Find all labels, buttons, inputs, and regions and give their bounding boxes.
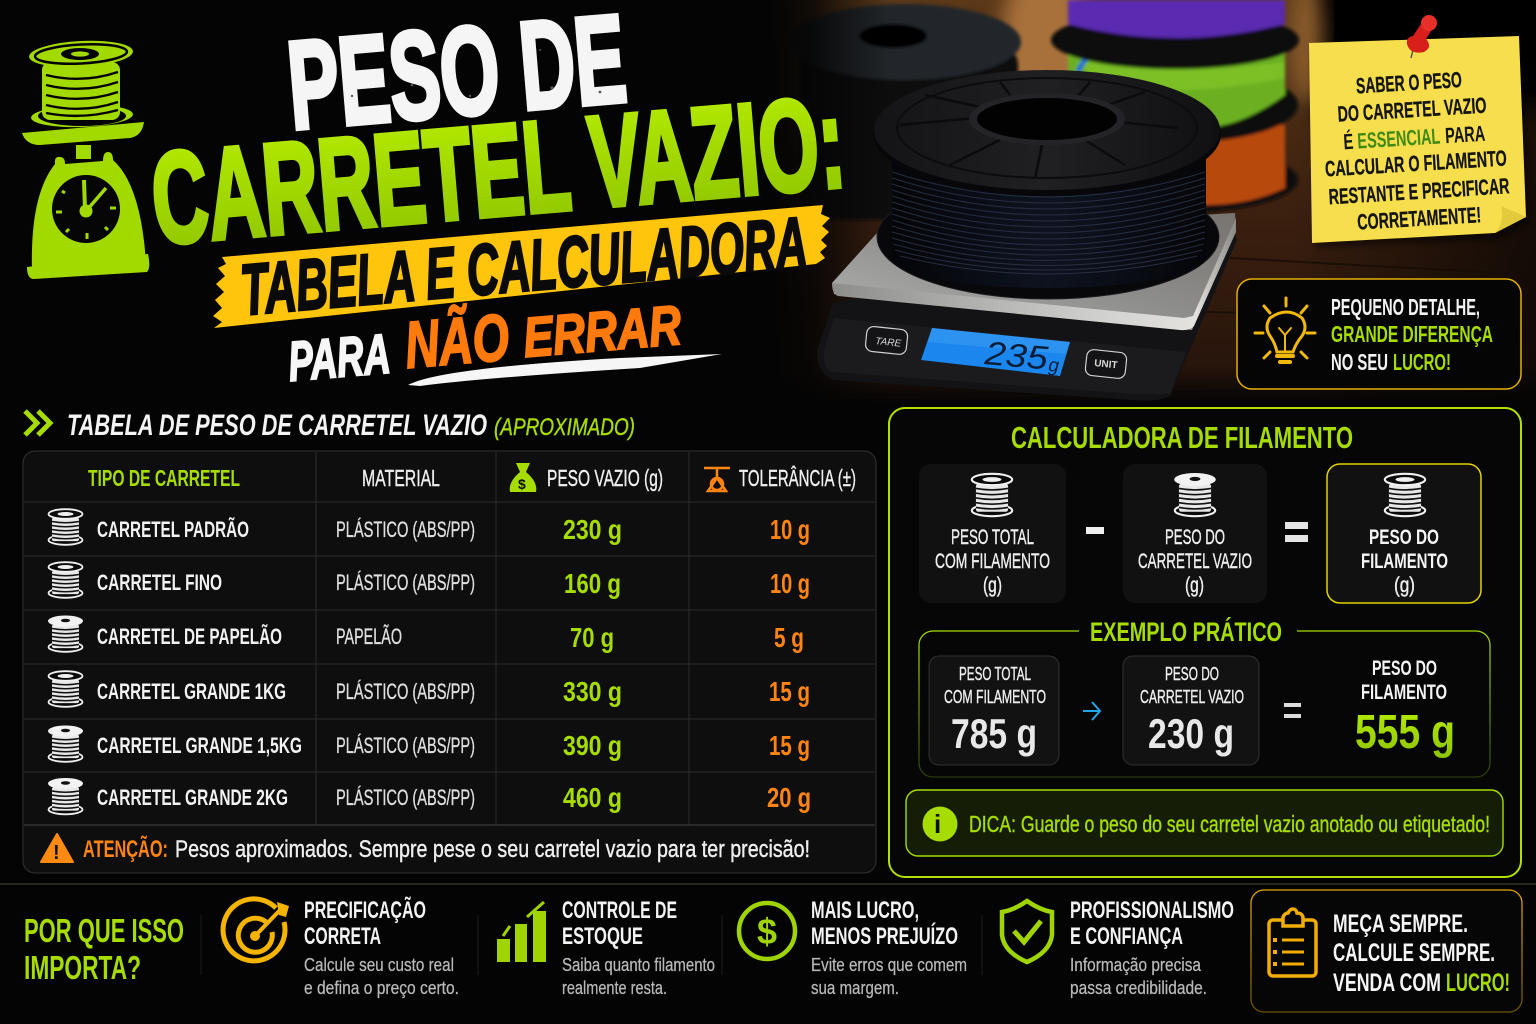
fade of photo into black	[770, 0, 890, 405]
example: peso total: PESO TOTAL	[959, 664, 1031, 684]
row: carretel grande 1,5kg: 15 g	[769, 730, 810, 761]
formula box: peso do filamento: (g)	[1394, 574, 1415, 597]
attention note: !	[53, 842, 60, 864]
row: carretel grande 2kg: 20 g	[767, 782, 811, 813]
formula box: peso total: (g)	[983, 574, 1002, 597]
icon: target	[223, 899, 289, 961]
item: controle de estoque: CONTROLE DE	[562, 897, 677, 924]
tip box: i	[934, 809, 941, 839]
icon: money bag: $	[518, 476, 526, 492]
row: carretel grande 1,5kg: PLÁSTICO (ABS/PP)	[336, 733, 475, 758]
row: carretel de papelão: CARRETEL DE PAPELÃO	[97, 624, 282, 649]
title: CARRETEL VAZIO: CARRETEL VAZIO:	[146, 68, 850, 272]
panel: weight table	[23, 451, 876, 873]
subtitle band: tabela e calculadora	[213, 203, 830, 331]
icon: light bulb	[1255, 298, 1315, 362]
icon: spool on kitchen scale	[22, 38, 149, 279]
heading	[24, 912, 184, 986]
heading: tabela: (APROXIMADO)	[494, 414, 635, 441]
example: result: FILAMENTO	[1361, 681, 1447, 704]
row: carretel grande 1kg: PLÁSTICO (ABS/PP)	[336, 679, 475, 704]
scale display 235g: 235	[982, 334, 1050, 377]
formula box: peso do filamento	[1327, 464, 1481, 603]
background dark spool	[789, 4, 1021, 220]
callout: pequeno detalhe	[1237, 279, 1521, 389]
main black filament spool	[873, 70, 1221, 299]
row: carretel padrão: 10 g	[770, 514, 810, 545]
row: carretel padrão: CARRETEL PADRÃO	[97, 517, 249, 542]
item: profissionalismo	[1002, 897, 1234, 998]
formula box: peso do filamento: FILAMENTO	[1361, 550, 1448, 573]
tip box	[906, 790, 1503, 856]
bottom strip: por que isso importa	[0, 884, 1536, 1012]
table header	[88, 463, 856, 492]
item: controle de estoque: Saiba quanto filamento	[562, 955, 715, 975]
item: mais lucro: sua margem.	[811, 978, 899, 998]
table header: PESO VAZIO (g)	[547, 465, 663, 491]
row: carretel fino: PLÁSTICO (ABS/PP)	[336, 570, 475, 595]
item: controle de estoque: realmente resta.	[562, 978, 667, 998]
icon: red push pin	[1407, 15, 1437, 58]
formula box: peso do carretel	[1123, 464, 1267, 603]
UNIT button: UNIT	[1094, 358, 1118, 371]
row: carretel grande 1,5kg: CARRETEL GRANDE 1,5KG	[97, 733, 302, 758]
row: carretel grande 1kg	[48, 671, 810, 707]
scale display 235g	[921, 328, 1070, 377]
title: PESO DE	[283, 0, 631, 156]
formula box: peso do carretel: PESO DO	[1165, 526, 1225, 549]
item: precificação correta: Calcule seu custo real	[304, 955, 454, 975]
icon: dollar circle: $	[757, 911, 777, 952]
item: precificação correta: e defina o preço certo.	[304, 978, 459, 998]
item: profissionalismo: Informação precisa	[1070, 955, 1202, 975]
table header: TIPO DE CARRETEL	[88, 465, 240, 491]
row: carretel grande 1kg: 330 g	[563, 676, 622, 707]
table header: MATERIAL	[362, 465, 440, 491]
row: carretel de papelão: PAPELÃO	[336, 624, 402, 649]
table header: TOLERÂNCIA (±)	[739, 465, 856, 491]
formula box: peso do carretel: CARRETEL VAZIO	[1138, 550, 1252, 573]
formula box: peso total: COM FILAMENTO	[935, 550, 1050, 573]
row: carretel fino: CARRETEL FINO	[97, 570, 222, 595]
icon: bar chart	[497, 902, 546, 962]
scale base	[817, 213, 1237, 400]
minus sign	[1086, 527, 1104, 534]
attention note: ATENÇÃO:	[83, 835, 168, 863]
formula box: peso do carretel: (g)	[1185, 574, 1204, 597]
callout: meça sempre	[1251, 890, 1522, 1012]
example: peso total: 785 g	[951, 710, 1037, 757]
equals sign	[1285, 522, 1308, 542]
icon: shield check	[1002, 901, 1052, 962]
row: carretel fino	[48, 562, 810, 599]
photo: filament spool on digital scale on wooden table	[770, 0, 1536, 405]
item: controle de estoque	[497, 897, 715, 998]
row: carretel grande 1,5kg	[48, 726, 810, 762]
panel: calculadora de filamento	[889, 408, 1521, 877]
example: peso do carretel: 230 g	[1148, 710, 1234, 757]
panel: exemplo prático: EXEMPLO PRÁTICO	[1090, 616, 1282, 647]
item: mais lucro: Evite erros que comem	[811, 955, 967, 975]
formula box: peso total	[919, 464, 1066, 603]
item: mais lucro	[739, 897, 967, 998]
row: carretel fino: 160 g	[564, 568, 621, 599]
row: carretel de papelão: 70 g	[570, 622, 614, 653]
icon: dollar circle	[739, 903, 795, 959]
icon: tolerance scale	[704, 468, 730, 491]
equals sign	[1284, 703, 1301, 718]
row: carretel grande 1kg: 15 g	[769, 676, 810, 707]
subtitle: para não errar	[286, 293, 722, 393]
item: mais lucro: MAIS LUCRO,	[811, 897, 919, 924]
panel: calculadora de filamento: CALCULADORA DE FILAMENTO	[1011, 420, 1353, 455]
TARE button	[865, 326, 908, 355]
callout: pequeno detalhe: NO SEU	[1331, 349, 1388, 375]
item: profissionalismo: PROFISSIONALISMO	[1070, 897, 1234, 924]
row: carretel grande 2kg: 460 g	[563, 782, 622, 813]
callout: pequeno detalhe: LUCRO!	[1393, 349, 1451, 375]
scale display 235g: g	[1048, 355, 1060, 377]
formula box: peso do filamento: PESO DO	[1369, 526, 1439, 549]
attention note	[41, 834, 810, 864]
item: precificação correta: PRECIFICAÇÃO	[304, 896, 426, 924]
example: result	[1355, 657, 1455, 759]
item: profissionalismo: passa credibilidade.	[1070, 978, 1207, 998]
row: carretel padrão: 230 g	[563, 514, 622, 545]
row: carretel padrão	[48, 509, 810, 545]
row: carretel de papelão: 5 g	[774, 622, 804, 653]
formula box: peso total: PESO TOTAL	[951, 526, 1034, 549]
subtitle: para não errar: NÃO	[402, 300, 512, 382]
example: peso total: COM FILAMENTO	[944, 687, 1046, 707]
example: peso do carretel: PESO DO	[1165, 664, 1219, 684]
example: peso do carretel: CARRETEL VAZIO	[1140, 687, 1244, 707]
TARE button: TARE	[875, 336, 902, 350]
item: precificação correta	[223, 896, 459, 998]
callout: meça sempre: MEÇA SEMPRE.	[1333, 910, 1468, 938]
item: controle de estoque: ESTOQUE	[562, 923, 643, 950]
callout: meça sempre: VENDA COM	[1333, 969, 1441, 997]
icon: clipboard	[1269, 909, 1316, 976]
subtitle band: tabela e calculadora: TABELA E CALCULADORA	[238, 203, 810, 331]
row: carretel grande 1,5kg: 390 g	[563, 730, 622, 761]
background stack of coloured spools	[1051, 0, 1299, 213]
sticky note	[1309, 15, 1530, 248]
attention note: Pesos aproximados. Sempre pese o seu carretel vazio para ter precisão!	[175, 836, 810, 863]
row: carretel grande 2kg	[48, 778, 811, 814]
row: carretel padrão: PLÁSTICO (ABS/PP)	[336, 517, 475, 542]
example: peso do carretel	[1123, 656, 1259, 765]
sticky note: SABER O PESO	[1355, 67, 1463, 98]
panel: exemplo prático	[919, 616, 1490, 777]
row: carretel grande 2kg: CARRETEL GRANDE 2KG	[97, 785, 288, 810]
heading: POR QUE ISSO	[24, 912, 184, 949]
arrow	[1083, 702, 1100, 720]
icon: money bag	[510, 463, 536, 492]
UNIT button	[1085, 349, 1127, 379]
sticky note: ESSENCIAL	[1357, 123, 1441, 153]
example: result: PESO DO	[1372, 657, 1437, 680]
sticky note: É	[1343, 129, 1354, 154]
row: carretel fino: 10 g	[770, 568, 810, 599]
subtitle: para não errar: PARA	[286, 322, 393, 393]
example: result: 555 g	[1355, 706, 1455, 759]
row: carretel grande 2kg: PLÁSTICO (ABS/PP)	[336, 785, 475, 810]
item: profissionalismo: E CONFIANÇA	[1070, 923, 1183, 950]
heading: IMPORTA?	[24, 949, 141, 986]
item: mais lucro: MENOS PREJUÍZO	[811, 922, 958, 950]
row: carretel grande 1kg: CARRETEL GRANDE 1KG	[97, 679, 286, 704]
row: carretel de papelão	[48, 616, 804, 653]
item: precificação correta: CORRETA	[304, 923, 381, 950]
example: peso total	[929, 656, 1059, 765]
sticky note: PARA	[1444, 121, 1486, 148]
heading: tabela: TABELA DE PESO DE CARRETEL VAZIO	[67, 409, 487, 442]
subtitle: para não errar: ERRAR	[521, 293, 684, 369]
